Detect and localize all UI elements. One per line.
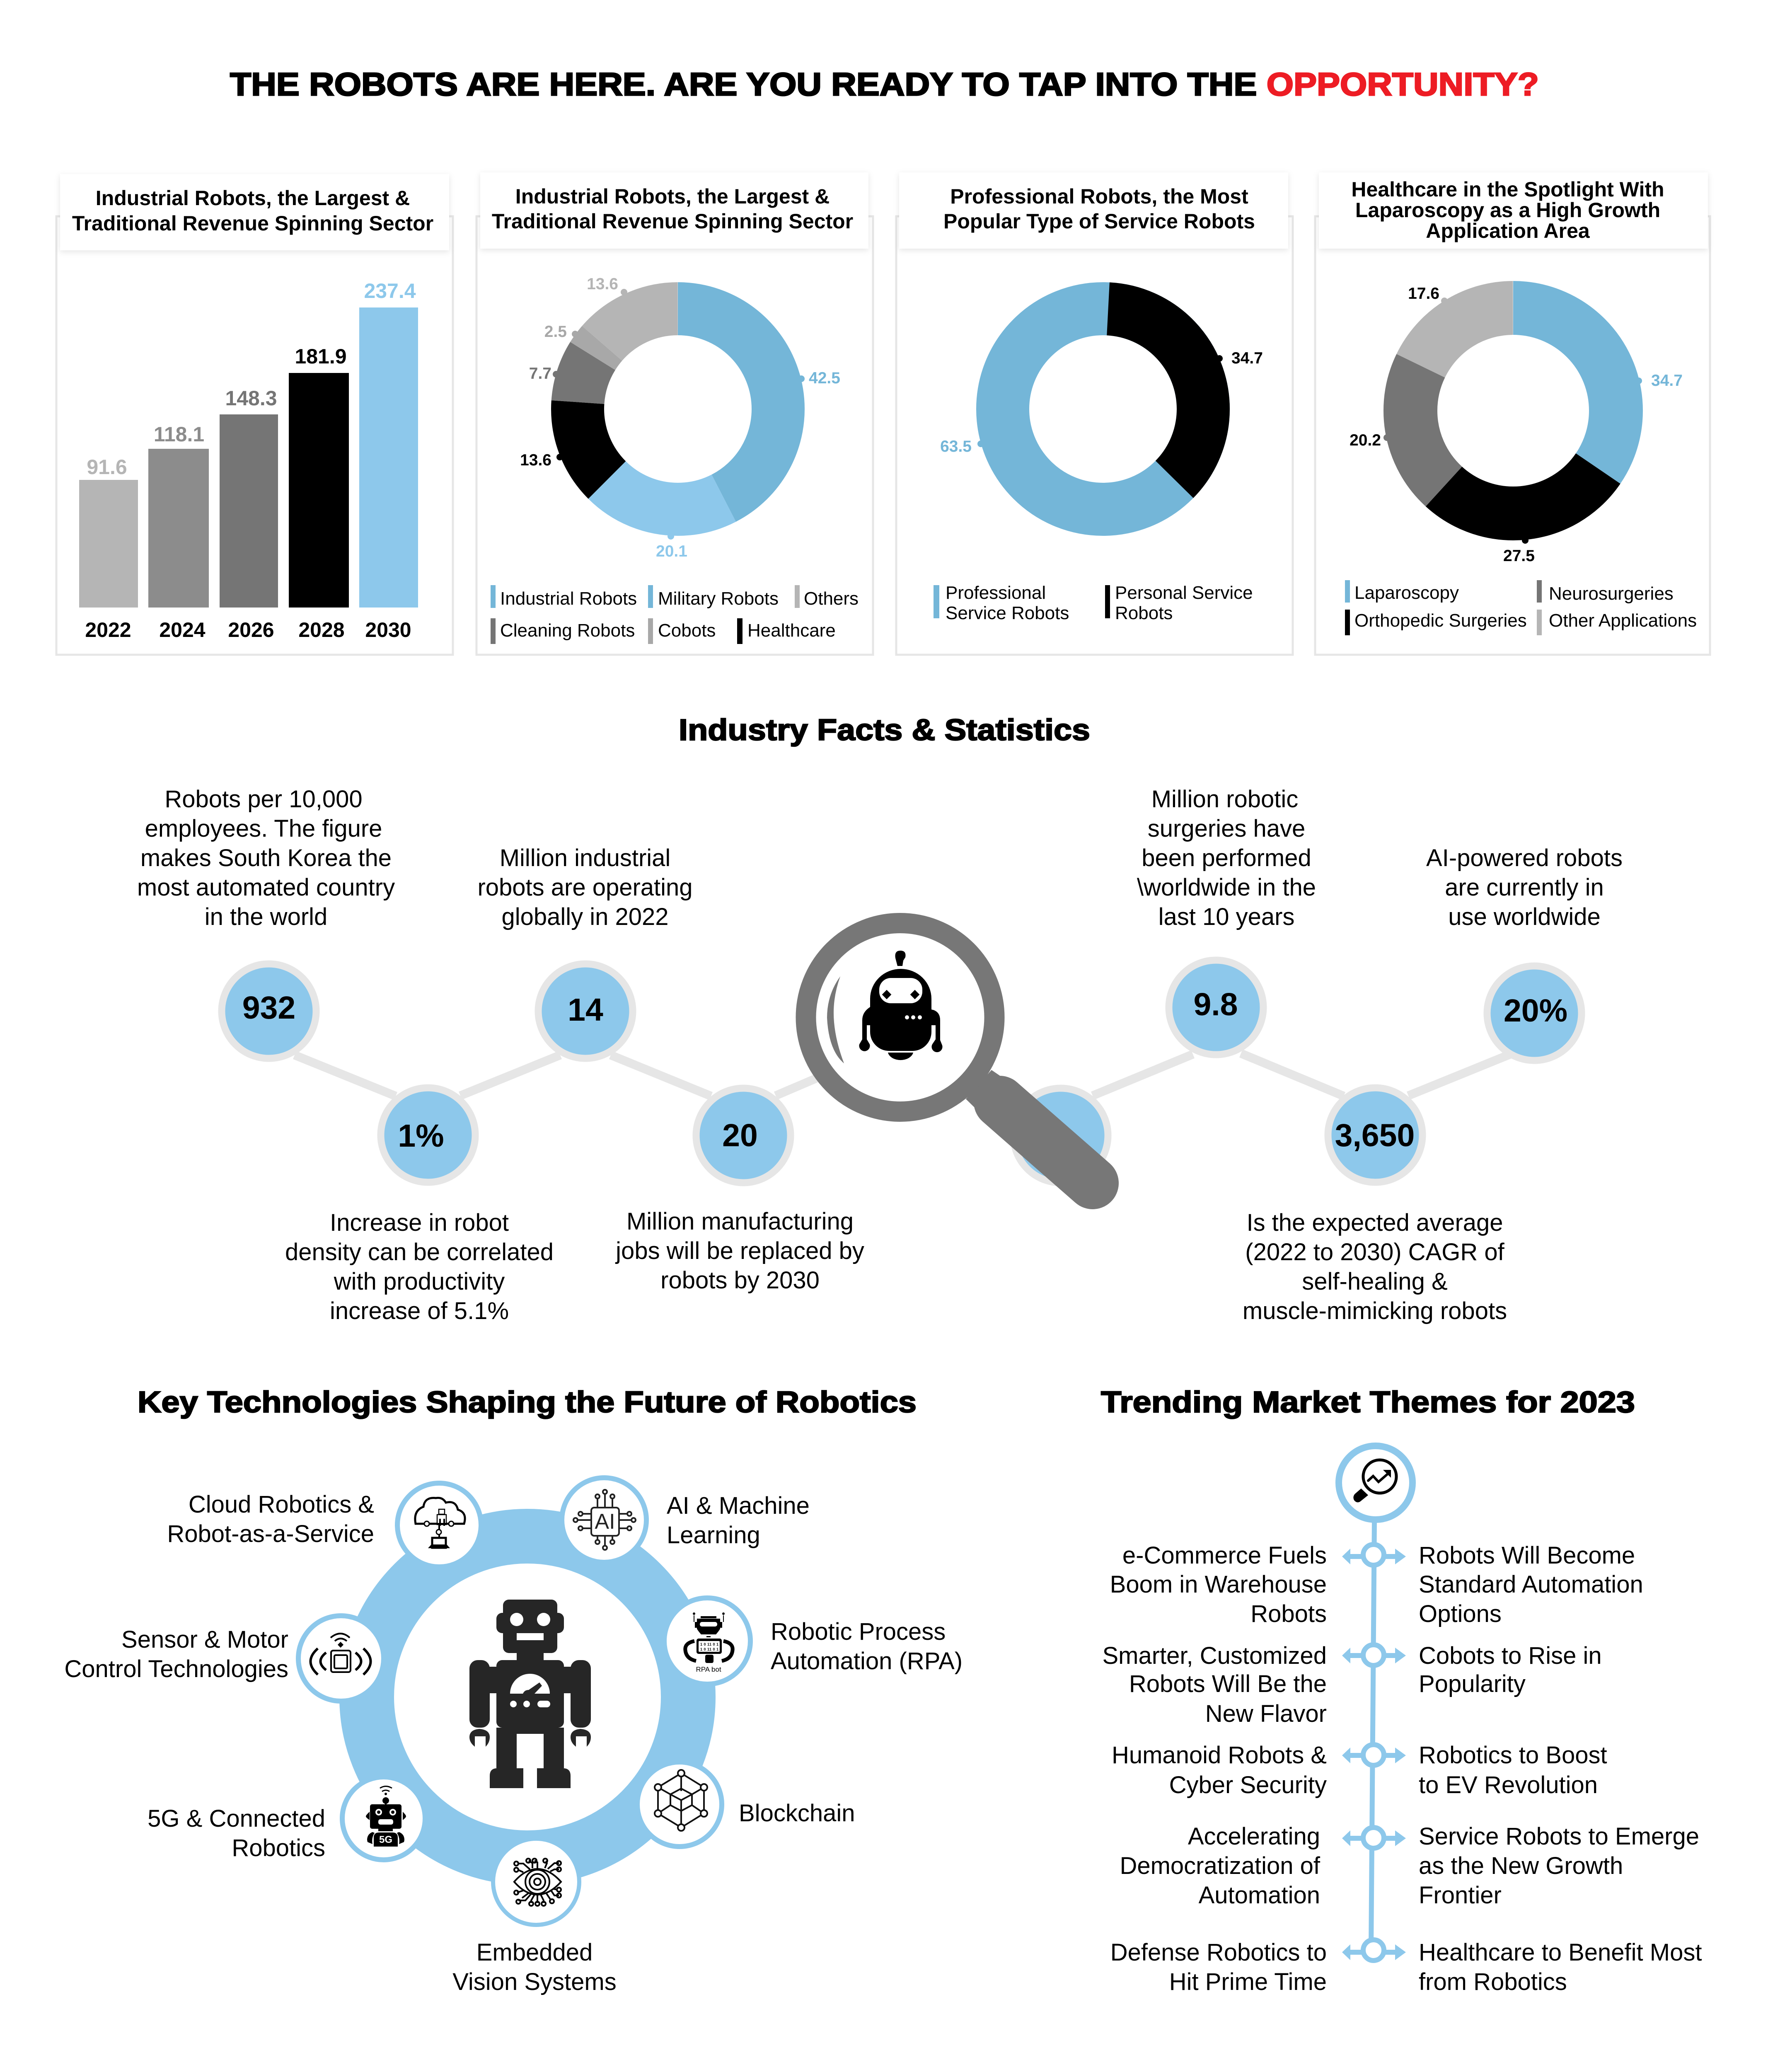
stat: 3,650 [1243,1088,1507,1324]
labels: technologies: AI & Machine [667,1492,810,1519]
bar chart [79,279,418,641]
donut chart [1410,308,1616,513]
stat: 20: robots by 2030 [660,1267,820,1294]
stat: 14 [477,845,693,1058]
stat: 9.8: 9.8 [1193,987,1238,1022]
stat: 1%: with productivity [334,1268,505,1295]
donut data labels: 20.1 [656,542,687,560]
legend: Other Applications [1549,610,1697,631]
donut data labels: 42.5 [809,369,840,387]
labels: technologies [64,1491,963,1995]
themes left column: Smarter, Customized [1102,1642,1327,1669]
themes right column: Healthcare to Benefit Most [1419,1939,1702,1966]
donut data labels: 34.7 [1651,372,1683,390]
stat: 9.8: been performed [1142,845,1311,871]
legend: Military Robots [658,588,779,609]
labels: technologies: Robot-as-a-Service [167,1520,374,1547]
legend [1345,580,1697,635]
stat: 932: makes South Korea the [140,845,392,871]
donut data labels: 2.5 [544,323,567,341]
panel heading: Application Area [1426,219,1590,242]
stat: 1%: density can be correlated [285,1239,554,1266]
themes left column: e-Commerce Fuels [1122,1542,1327,1569]
themes right column: Robots Will Become [1419,1542,1635,1569]
node: 5G robot [342,1777,425,1860]
themes right column: Cobots to Rise in [1419,1642,1602,1669]
node: sensor [298,1616,384,1701]
bar chart: 181.9 [295,345,347,368]
labels: technologies: Learning [667,1522,760,1549]
themes left column: Defense Robotics to [1110,1939,1327,1966]
bar chart: 118.1 [154,423,204,446]
diagram: key technologies ring [298,1478,750,1925]
bar chart: 2026 [228,618,274,641]
legend: Personal Service [1115,583,1253,603]
stat: 3,650: self-healing & [1302,1268,1448,1295]
donut data labels: 13.6 [587,275,618,293]
donut data labels: 17.6 [1408,285,1439,303]
stat: 14: globally in 2022 [501,903,669,930]
donut data labels: 34.7 [1231,349,1263,367]
themes left column: Boom in Warehouse [1110,1571,1327,1598]
stat: 20%: AI-powered robots [1426,845,1623,871]
labels: technologies: Control Technologies [64,1656,288,1682]
stat: 1% [285,1088,554,1324]
icon: magnifier with robot [806,923,1110,1202]
stat: 932 [137,786,395,1058]
legend: Others [804,588,859,609]
themes left column: New Flavor [1205,1700,1327,1727]
themes right column [1419,1542,1702,1995]
stat: 14: Million industrial [500,845,670,871]
timeline arrows [1342,1549,1406,1960]
bar chart: 2028 [298,618,345,641]
stat: 932: in the world [205,903,327,930]
legend: Neurosurgeries [1549,583,1674,604]
donut data labels: 27.5 [1503,547,1535,565]
themes right column: Service Robots to Emerge [1419,1823,1699,1850]
themes right column: Options [1419,1600,1502,1627]
stat: 20: Million manufacturing [626,1208,854,1235]
stat: 3,650: 3,650 [1335,1118,1415,1153]
stat: 932: Robots per 10,000 [164,786,363,813]
themes right column: Robotics to Boost [1419,1742,1607,1769]
stat: 3,650: Is the expected average [1246,1209,1503,1236]
stat: 1%: Increase in robot [330,1209,509,1236]
labels: technologies: Blockchain [739,1800,855,1827]
node: AI chip: AI [595,1510,615,1534]
stat: 20% [1426,845,1623,1060]
themes left column: Robots Will Be the [1129,1670,1327,1697]
icon: robot in lens [859,951,942,1060]
node: blockchain [637,1762,722,1847]
themes left column: Accelerating [1188,1823,1320,1850]
themes left column: Hit Prime Time [1169,1968,1327,1995]
themes right column: Frontier [1419,1882,1502,1909]
legend: Healthcare [747,620,836,641]
donut data labels [940,349,1263,455]
themes right column: from Robotics [1419,1968,1567,1995]
stat: 1%: increase of 5.1% [330,1297,509,1324]
stat: 932: 932 [242,990,295,1026]
stat: 3,650: (2022 to 2030) CAGR of [1245,1239,1505,1266]
panel heading: Industrial Robots, the Largest & [96,186,410,210]
timeline connectors [295,1053,1510,1096]
donut chart [578,309,778,509]
bar chart: 148.3 [225,387,277,410]
title: THE ROBOTS ARE HERE. ARE YOU READY TO TAP INTO THE OPPORTUNITY? [230,66,1539,102]
labels: technologies: Cloud Robotics & [189,1491,374,1518]
stat: 9.8: surgeries have [1148,815,1305,842]
stat: 20: 20 [722,1118,758,1153]
heading: industry facts: Industry Facts & Statistics [679,714,1090,747]
node: RPA bot [664,1598,750,1684]
donut data labels: 13.6 [520,451,551,469]
node: AI chip [562,1478,646,1562]
stat: 20: jobs will be replaced by [615,1237,864,1264]
legend [491,585,859,644]
bar chart: 91.6 [87,455,127,479]
legend: Cobots [658,620,716,641]
themes left column: Democratization of [1120,1852,1321,1879]
bar chart: 2030 [365,618,411,641]
labels: technologies: Automation (RPA) [771,1648,963,1675]
panel heading: Laparoscopy as a High Growth [1355,198,1660,222]
donut data labels: 20.2 [1350,431,1381,449]
legend [934,583,1253,623]
donut data labels: 63.5 [940,438,972,455]
node: RPA bot: 1 0 11 0 1 [700,1642,719,1646]
panel heading: Traditional Revenue Spinning Sector [72,212,433,235]
legend: Professional [946,583,1046,603]
panel heading: Industrial Robots, the Largest & [515,185,830,208]
stat: hidden circle behind magnifier [1013,1088,1108,1183]
labels: technologies: 5G & Connected [148,1805,325,1832]
timeline nodes [1363,1544,1384,1961]
stat: 20 [615,1088,864,1294]
stat: 14: robots are operating [477,874,693,901]
panel heading: Healthcare in the Spotlight With [1351,178,1664,201]
labels: technologies: Robotic Process [771,1618,946,1645]
stat: 932: employees. The figure [145,815,382,842]
node: 5G robot: 5G [379,1834,392,1845]
legend: Cleaning Robots [500,620,635,641]
bar chart: 2024 [159,618,206,641]
node: RPA bot: 1 0 11 0 1 [700,1647,719,1651]
stat: 932: most automated country [137,874,395,901]
panel heading: Popular Type of Service Robots [943,210,1255,233]
stat: 9.8: last 10 years [1159,903,1294,930]
heading: key technologies: Key Technologies Shaping the Future of Robotics [138,1386,917,1419]
themes right column: Popularity [1419,1670,1526,1697]
donut data labels [520,275,840,560]
icon: trend magnifier [1339,1446,1412,1520]
stat: 3,650: muscle-mimicking robots [1243,1297,1507,1324]
panel: donut professional robots [896,172,1293,655]
labels: technologies: Embedded [476,1939,593,1966]
labels: technologies: Sensor & Motor [121,1626,288,1653]
legend: Orthopedic Surgeries [1354,610,1527,631]
heading: market themes: Trending Market Themes for 2023 [1101,1386,1635,1419]
stat: 9.8: \worldwide in the [1137,874,1316,901]
labels: technologies: Vision Systems [452,1968,617,1995]
panel: donut revenue share [476,172,873,655]
node: cloud robotics [397,1483,481,1567]
themes left column [1102,1542,1327,1995]
legend: Laparoscopy [1354,583,1459,603]
stat: 9.8 [1137,786,1316,1055]
stat: 20%: 20% [1504,993,1567,1029]
node: embedded vision [493,1839,579,1925]
legend: Robots [1115,603,1173,623]
panel: bar chart industrial robots [56,174,453,655]
bar chart: 237.4 [364,279,416,303]
donut chart [1003,309,1203,509]
node: RPA bot: RPA bot [696,1665,721,1673]
legend: Industrial Robots [500,588,637,609]
themes right column: to EV Revolution [1419,1772,1598,1798]
panel heading: Professional Robots, the Most [950,185,1248,208]
themes left column: Cyber Security [1169,1772,1327,1798]
labels: technologies: Robotics [232,1835,325,1861]
stat: 9.8: Million robotic [1151,786,1298,813]
themes left column: Humanoid Robots & [1112,1742,1327,1769]
themes right column: Standard Automation [1419,1571,1643,1598]
stat: 1%: 1% [398,1118,444,1154]
stat: 20%: use worldwide [1448,903,1601,930]
donut data labels [1350,285,1683,565]
stat: 20%: are currently in [1445,874,1604,901]
donut data labels: 7.7 [529,365,551,382]
diagram: market themes timeline [1102,1446,1702,1995]
themes left column: Robots [1250,1600,1327,1627]
icon: central robot [469,1600,591,1788]
themes left column: Automation [1199,1882,1320,1909]
panel: donut healthcare [1315,172,1710,655]
bar chart: 2022 [85,618,131,641]
themes right column: as the New Growth [1419,1852,1623,1879]
panel heading: Traditional Revenue Spinning Sector [492,210,853,233]
legend: Service Robots [946,603,1069,623]
stat: 14: 14 [568,992,603,1028]
